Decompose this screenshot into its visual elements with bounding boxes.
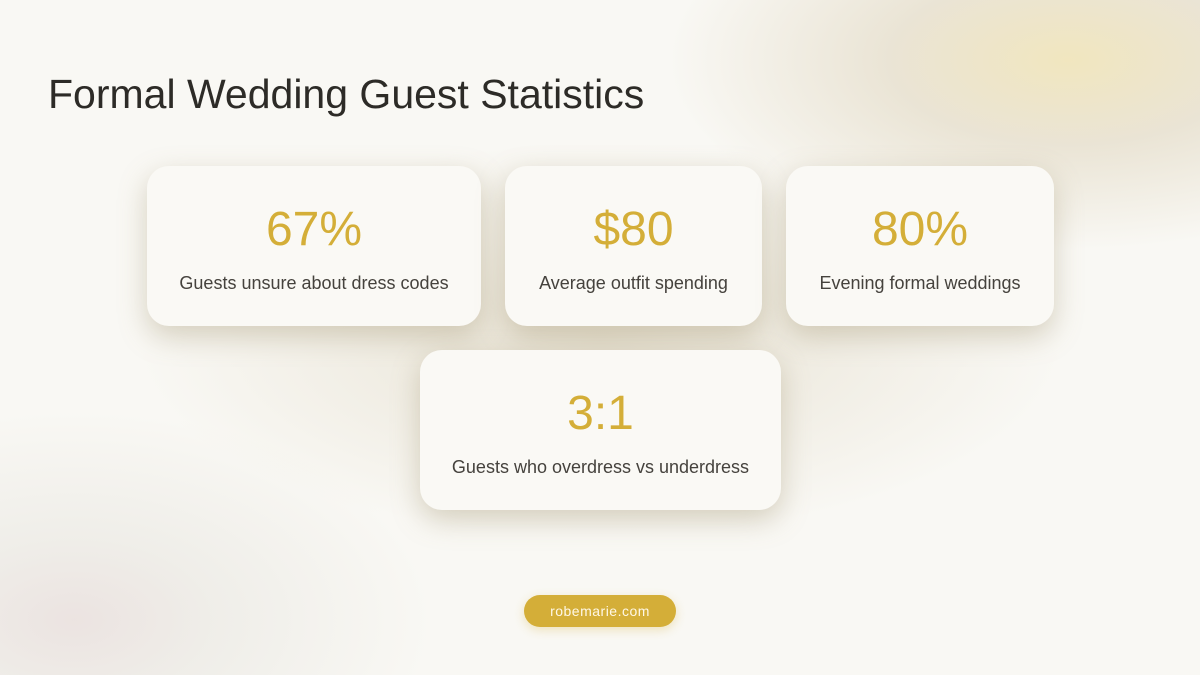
- card: $80: Average outfit spending: [539, 273, 728, 293]
- card: 80%: Evening formal weddings: [819, 273, 1021, 293]
- card: 3:1: Guests who overdress vs underdress: [452, 457, 749, 477]
- card: $80: $80: [593, 203, 674, 256]
- card: 67%: 67%: [266, 203, 362, 256]
- title: Formal Wedding Guest Statistics: [48, 71, 644, 117]
- card: 3:1: [420, 350, 781, 510]
- card: 67%: [147, 166, 481, 326]
- footer pill: [524, 595, 676, 627]
- card: 67%: Guests unsure about dress codes: [179, 273, 449, 293]
- card: $80: [505, 166, 762, 326]
- card: 80%: 80%: [872, 203, 968, 256]
- card: 3:1: 3:1: [567, 387, 634, 440]
- card: 80%: [786, 166, 1054, 326]
- footer pill: robemarie.com: [550, 603, 650, 619]
